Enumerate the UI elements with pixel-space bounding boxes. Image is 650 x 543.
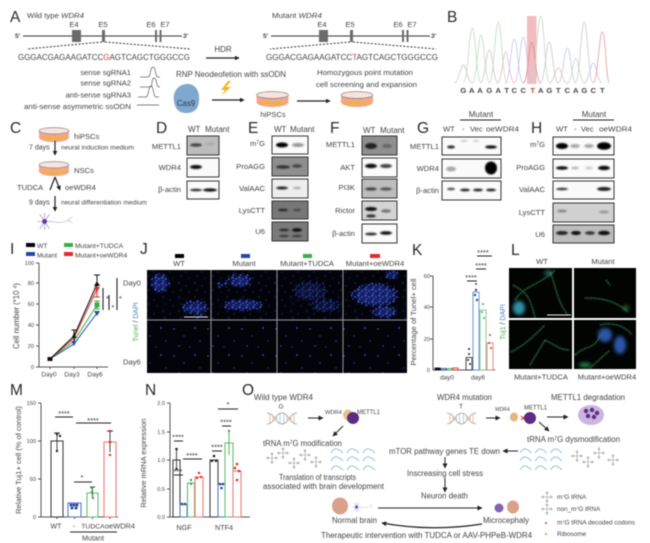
mutant pathway: METTL1 xyxy=(524,406,548,412)
significance brackets xyxy=(103,278,122,312)
icon: Cas9 blob: Cas9 xyxy=(177,99,195,108)
column labels: Mutant xyxy=(380,126,405,135)
axes: 0 xyxy=(427,368,430,374)
highlight xyxy=(527,16,536,84)
axes: 60 xyxy=(28,302,34,308)
mutant gene track: E4 xyxy=(317,20,327,29)
flow labels: 9 days xyxy=(29,200,50,206)
panel B: Sanger chromatogram xyxy=(447,9,609,95)
panel H: rescue northern blot xyxy=(516,110,632,243)
bars xyxy=(435,283,493,370)
outcome row: Normal brain xyxy=(332,516,377,525)
significance: **** xyxy=(477,248,489,257)
heading G: G xyxy=(417,120,429,137)
wild type gene track: E5 xyxy=(98,20,108,29)
sgRNA list: anti-sense sgRNA3 xyxy=(66,90,131,100)
axes: 1.0 xyxy=(157,458,165,464)
icon: hiPSC dish xyxy=(256,92,288,119)
axes: day0 xyxy=(440,374,454,382)
outcome row: Therapeutic intervention with TUDCA or AAV-PHPeB-WDR4 xyxy=(321,531,533,540)
outcome row: Microcephaly xyxy=(483,516,529,525)
mutant pathway: mTOR pathway genes TE down xyxy=(389,447,500,456)
axes: Cell number (*10 xyxy=(12,291,21,349)
legend: WT xyxy=(37,243,48,250)
mutant pathway: tRNA m xyxy=(527,435,554,444)
sequence letters: A xyxy=(477,86,483,95)
column labels: Mutant+TUDCA xyxy=(514,372,569,382)
mutant gene track: E6 xyxy=(393,20,403,29)
rotated label: Tunel / DAPI xyxy=(133,302,140,342)
blots xyxy=(442,137,501,200)
heading D: D xyxy=(156,120,167,137)
significance: * xyxy=(227,400,230,409)
arrow xyxy=(54,196,56,211)
axes xyxy=(12,261,108,378)
axes: 20 xyxy=(28,344,34,350)
axes: 60 xyxy=(424,274,430,280)
panel C: differentiation flow xyxy=(10,120,147,230)
row labels xyxy=(236,139,266,236)
significance: **** xyxy=(465,273,477,282)
column labels xyxy=(443,124,519,134)
legend xyxy=(542,492,635,538)
axes: Day6 xyxy=(87,372,103,378)
micrograph grid xyxy=(147,270,407,373)
row labels: U6 xyxy=(535,230,545,239)
axes: oeWDR4 xyxy=(105,522,135,530)
significance: **** xyxy=(186,451,198,460)
heading I: I xyxy=(10,241,14,258)
sgRNA list xyxy=(24,67,160,111)
bars xyxy=(173,430,241,517)
heading K: K xyxy=(412,242,423,259)
column labels xyxy=(188,125,230,134)
significance xyxy=(465,248,492,282)
panel I: cell growth line chart xyxy=(10,241,128,378)
row labels xyxy=(152,142,181,194)
text: RNP nucleofection: RNP Neodeofetion with ssODN xyxy=(176,70,286,79)
axes: 0 xyxy=(33,515,36,521)
row labels: ValAAC xyxy=(239,184,266,193)
axes: day6 xyxy=(471,374,485,382)
mutant pathway: 7 xyxy=(554,436,557,442)
axes: NGF xyxy=(176,523,192,532)
sgRNA list: sense sgRNA1 xyxy=(80,68,131,77)
mutant pathway: WDR4 xyxy=(495,407,510,413)
axes: 40 xyxy=(28,323,34,329)
arrow xyxy=(54,141,56,155)
panel A: gene editing strategy xyxy=(10,9,438,119)
neuron xyxy=(37,213,72,230)
heading B: B xyxy=(447,9,457,26)
column labels: Vec xyxy=(581,124,594,134)
significance brackets: * xyxy=(119,294,122,303)
column labels: Mutant xyxy=(205,125,230,134)
significance: **** xyxy=(475,261,487,270)
row labels: ProAGG xyxy=(516,163,545,172)
row labels: METTL1 xyxy=(326,140,355,149)
sequence letters: A xyxy=(469,86,475,95)
arrow: HDR: HDR xyxy=(214,45,232,54)
row labels: LysCTT xyxy=(239,206,265,215)
arrow xyxy=(297,100,330,102)
blots xyxy=(553,137,614,243)
sequence letters: T xyxy=(530,86,535,95)
legend xyxy=(26,243,128,260)
icon: expanded dish xyxy=(341,92,373,107)
flow labels: NSCs xyxy=(74,166,94,175)
significance brackets: * xyxy=(106,294,109,303)
axes: 80 xyxy=(28,281,34,287)
icon: hiPSC dish: hiPSCs xyxy=(260,110,286,119)
panel F: western blot xyxy=(326,120,405,243)
significance: **** xyxy=(172,432,184,442)
column labels: WT xyxy=(363,126,376,135)
heading C: C xyxy=(10,120,21,137)
row labels: METTL1 xyxy=(410,142,439,151)
axes: 1.5 xyxy=(157,430,165,436)
row labels: AKT xyxy=(340,163,355,172)
axes: 50 xyxy=(30,477,36,483)
outcome row xyxy=(321,498,533,540)
wild type gene track: GGGACGAGAAGATCCGAGTCAGCTGGGCCG xyxy=(18,53,190,62)
sequence letters: C xyxy=(591,86,597,95)
axes: 0.5 xyxy=(157,487,165,493)
mutant gene track: 3' xyxy=(431,33,437,40)
significance: **** xyxy=(220,418,232,426)
flow labels: oeWDR4 xyxy=(65,183,96,192)
wild type pathway: WDR4 xyxy=(325,410,342,416)
axes: - xyxy=(73,524,76,530)
heading M: M xyxy=(10,382,23,399)
NSC dish xyxy=(39,162,69,176)
legend: G tRNA decoded codons xyxy=(565,520,635,526)
sequence letters: G xyxy=(486,86,492,95)
column labels: oeWDR4 xyxy=(486,124,519,134)
row labels xyxy=(516,140,546,239)
row labels xyxy=(410,142,439,195)
icon: Cas9 blob xyxy=(174,84,199,113)
sequence letters: A xyxy=(573,86,579,95)
sequence letters: C xyxy=(565,86,571,95)
sequence letters: G xyxy=(460,86,466,95)
panel O: mechanism schematic xyxy=(242,382,635,540)
wild type gene track: Wild type WDR4 xyxy=(27,11,84,20)
row labels: G xyxy=(259,139,265,148)
wild type pathway: 7 xyxy=(290,440,293,446)
axes: TUDCA xyxy=(81,524,105,530)
axes: Percentage of Tunel+ cell xyxy=(409,278,418,365)
condition legend: Mutant+oeWDR4 xyxy=(346,259,404,268)
wild type pathway xyxy=(254,393,385,491)
sequence letters: C xyxy=(512,86,518,95)
axes: 4 xyxy=(13,285,19,288)
sgRNA list: sense sgRNA2 xyxy=(80,78,131,88)
row labels: Rictor xyxy=(335,206,355,215)
wild type gene track xyxy=(15,11,190,62)
mutant pathway: METTL1 degradation xyxy=(551,393,625,402)
significance xyxy=(172,400,238,476)
flow labels xyxy=(17,132,147,206)
icon: lightning xyxy=(221,81,231,96)
column labels: WT xyxy=(443,124,455,134)
panel K: Tunel bar chart xyxy=(409,242,495,382)
significance: * xyxy=(81,473,84,482)
column labels xyxy=(363,126,405,135)
heading J: J xyxy=(140,241,148,258)
sequence letters: T xyxy=(600,86,605,95)
heading F: F xyxy=(330,120,339,137)
condition legend: WT xyxy=(173,259,185,268)
axes: ) xyxy=(12,283,21,286)
sequence letters xyxy=(460,86,605,95)
significance: **** xyxy=(87,416,99,425)
heading N: N xyxy=(145,382,156,399)
significance: *** xyxy=(174,467,182,476)
axes: 0.0 xyxy=(157,515,165,521)
row labels: β-actin xyxy=(416,186,439,195)
row labels: WDR4 xyxy=(417,164,439,173)
column labels: WT xyxy=(536,257,548,266)
row labels: β-actin xyxy=(158,185,181,194)
row labels: G xyxy=(539,140,545,149)
sequence letters: G xyxy=(546,86,552,95)
column labels: WT xyxy=(274,125,287,134)
arrow xyxy=(212,99,244,101)
legend: 7 xyxy=(562,494,565,498)
row labels: ProAGG xyxy=(236,162,265,171)
micrographs xyxy=(509,268,636,369)
row labels xyxy=(326,140,355,238)
legend: non_m xyxy=(557,506,576,513)
column labels: Mutant xyxy=(290,125,315,134)
flow labels: TUDCA xyxy=(17,183,44,192)
sequence letters: C xyxy=(521,86,527,95)
axes: Mutant xyxy=(82,534,104,542)
axes xyxy=(14,401,135,542)
legend: Mutant+TUDCA xyxy=(75,243,124,250)
legend: Mutant+oeWDR4 xyxy=(75,252,128,260)
heading L: L xyxy=(511,242,520,259)
panel L: Tuj1 microscopy xyxy=(500,242,636,382)
row labels: Day6 xyxy=(123,358,141,366)
wild type pathway: Wild type WDR4 xyxy=(254,393,314,402)
legend: Ribosome xyxy=(557,531,587,538)
axes: 100 xyxy=(27,439,36,445)
panel N: mRNA expression bar chart xyxy=(139,382,250,532)
row labels: m xyxy=(530,140,536,149)
significance: **** xyxy=(211,442,223,452)
chromatogram traces xyxy=(454,16,609,83)
mutant pathway: WDR4 mutation xyxy=(437,393,492,402)
wild type pathway: associated with brain development xyxy=(263,482,385,491)
bars xyxy=(51,430,116,517)
legend: G tRNA xyxy=(578,506,601,513)
wild type gene track: E6 xyxy=(146,20,156,29)
panel J: Tunel DAPI microscopy xyxy=(123,241,407,373)
axes: 20 xyxy=(424,337,430,343)
panel D: western blot xyxy=(152,120,230,199)
axes: Day3 xyxy=(64,372,80,378)
legend: G tRNA xyxy=(564,494,587,501)
significance: **** xyxy=(58,409,70,418)
mutant gene track: E5 xyxy=(345,20,355,29)
legend: 7 xyxy=(562,519,565,524)
mutant gene track: E7 xyxy=(407,20,417,29)
condition legend: Mutant xyxy=(232,259,256,268)
axes: Relative Tuj1+ cell (% of control) xyxy=(14,406,23,514)
sequence letters: T xyxy=(556,86,561,95)
axes: WT xyxy=(51,524,62,530)
row labels: U6 xyxy=(255,227,265,236)
legend: 7 xyxy=(576,506,579,510)
sgRNA list: anti-sense asymmetric ssODN xyxy=(24,102,131,111)
wild type pathway: G modification xyxy=(292,439,342,448)
condition legend xyxy=(173,254,404,268)
mutant pathway xyxy=(389,393,625,500)
column labels: - xyxy=(574,124,577,134)
sequence letters: A xyxy=(496,86,502,95)
condition legend: Mutant+TUDCA xyxy=(280,259,335,268)
text: screening line 2: cell screening and expansion xyxy=(316,80,417,89)
lines xyxy=(48,275,100,361)
row labels xyxy=(123,278,141,366)
column labels: - xyxy=(462,124,465,134)
mutant gene track: GGGACGAGAAGATCCTAGTCAGCTGGGCCG xyxy=(266,53,438,62)
axes: Day0 xyxy=(41,372,57,378)
legend: m xyxy=(557,520,562,526)
wild type gene track: 3' xyxy=(183,33,189,40)
row labels: Day0 xyxy=(123,278,141,288)
axes: Relative mRNA expression xyxy=(139,418,148,508)
rotated label: Tuj1 / DAPI xyxy=(500,304,507,340)
mutant pathway: T xyxy=(459,404,463,410)
sequence letters: A xyxy=(538,86,544,95)
significance xyxy=(55,409,111,482)
mutant bracket: Mutant xyxy=(469,110,494,119)
sequence letters: T xyxy=(504,86,509,95)
column labels xyxy=(556,124,632,134)
mutant pathway: Inscreasing cell stress xyxy=(407,469,483,478)
row labels: m xyxy=(250,139,256,148)
blots xyxy=(187,136,219,199)
axes xyxy=(409,274,495,382)
row labels: 7 xyxy=(536,141,539,147)
row labels: PI3K xyxy=(339,183,355,192)
flow labels: neural differentiation medium xyxy=(61,200,147,206)
legend: Mutant xyxy=(37,252,57,260)
flow labels: hiPSCs xyxy=(74,132,100,141)
blots xyxy=(362,136,397,243)
legend: m xyxy=(557,494,562,501)
column labels: WT xyxy=(556,124,568,134)
axes: 150 xyxy=(27,401,36,407)
column labels: oeWDR4 xyxy=(599,124,632,134)
mutant gene track: 5' xyxy=(263,33,269,40)
mutant gene track: Mutant WDR4 xyxy=(272,11,322,20)
column labels: Mutant xyxy=(591,257,615,266)
blots xyxy=(272,136,308,241)
row labels: LysCTT xyxy=(519,208,545,217)
hiPSCs dish xyxy=(39,128,69,142)
text: screening: Homozygous point mutation xyxy=(317,68,413,77)
axes: 100 xyxy=(25,261,34,267)
heading E: E xyxy=(248,120,258,137)
column labels: Mutant+oeWDR4 xyxy=(578,372,636,382)
heading O: O xyxy=(242,382,254,399)
sequence letters: G xyxy=(581,86,587,95)
row labels: β-actin xyxy=(332,229,355,238)
row labels: 7 xyxy=(256,140,259,146)
wild type pathway: METTL1 xyxy=(357,410,381,416)
wild type gene track: E4 xyxy=(69,20,79,29)
heading H: H xyxy=(531,120,542,137)
axes: 2.0 xyxy=(157,401,165,407)
mutant pathway: G dysmodification xyxy=(557,435,620,444)
axes: 0 xyxy=(31,365,34,371)
panel E: northern blot xyxy=(236,120,315,241)
mutant pathway: Neuron death xyxy=(421,492,468,500)
panel G: rescue western blot xyxy=(410,110,519,200)
mutant bracket: Mutant xyxy=(582,110,607,119)
heading A: A xyxy=(10,9,21,26)
arrow: HDR xyxy=(206,45,239,58)
column labels xyxy=(274,125,315,134)
panel M: Tuj1 bar chart xyxy=(10,382,135,542)
flow labels: neural induction medium xyxy=(61,144,134,152)
wild type pathway: G xyxy=(278,404,284,410)
wild type pathway: tRNA m xyxy=(263,439,290,448)
column labels: Vec xyxy=(470,124,483,134)
axes xyxy=(139,401,250,532)
mutant gene track xyxy=(263,11,438,62)
flow labels: 7 days xyxy=(29,144,50,152)
axes: NTF4 xyxy=(215,523,233,532)
row labels: METTL1 xyxy=(152,142,181,151)
wild type pathway: Translation of transcripts xyxy=(279,473,356,482)
row labels: ValAAC xyxy=(519,185,546,194)
column labels: WT xyxy=(188,125,201,134)
fork arrows xyxy=(50,177,60,190)
axes: 40 xyxy=(424,305,430,311)
column labels xyxy=(514,257,636,382)
wild type gene track: E7 xyxy=(160,20,170,29)
wild type gene track: 5' xyxy=(15,33,21,40)
row labels: WDR4 xyxy=(159,163,181,172)
significance brackets: * xyxy=(112,303,115,312)
